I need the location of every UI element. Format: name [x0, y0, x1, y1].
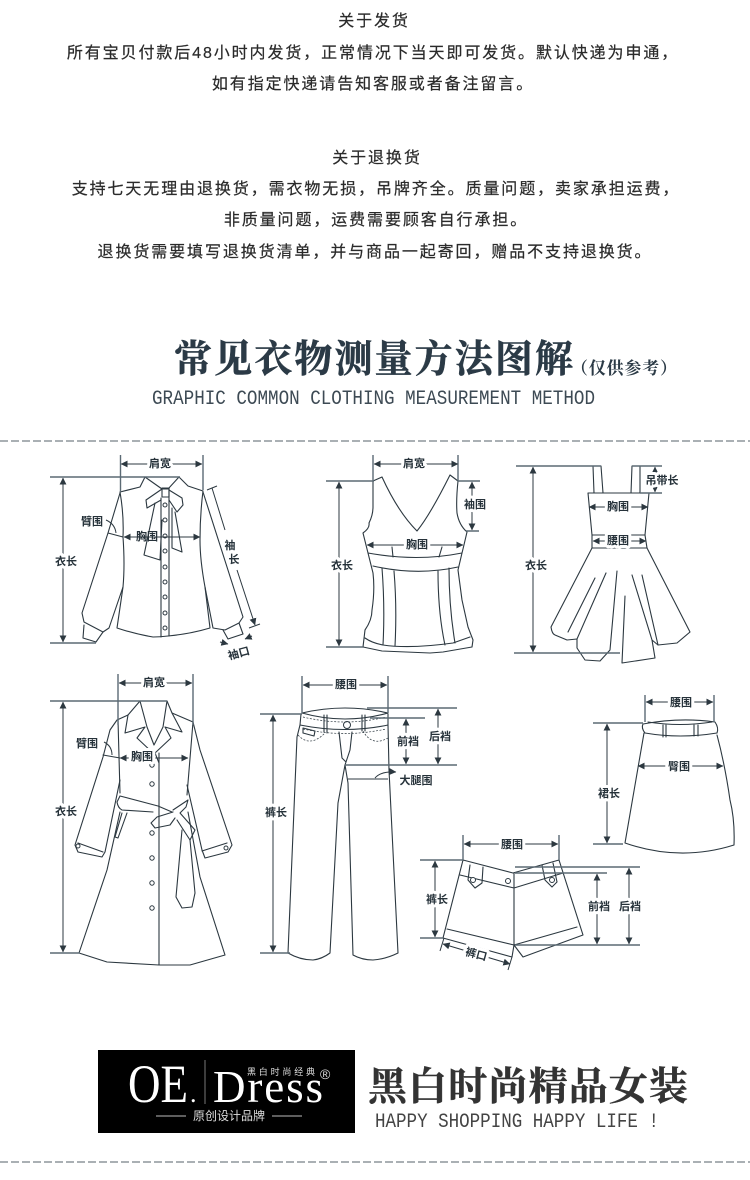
- slogan chinese: 黑白时尚精品女装: [368, 1066, 688, 1109]
- garment diagram: long coat: [50, 674, 232, 965]
- measure: length: 衣长: [55, 554, 77, 568]
- heading: shipping: 关于发货: [338, 12, 410, 30]
- measure: arm: [81, 514, 116, 533]
- measure: shoulder: 肩宽: [143, 675, 165, 689]
- measure: shoulder: [121, 456, 202, 470]
- garment diagram: blouse: [50, 455, 260, 663]
- text block: returns notes: [72, 149, 680, 261]
- measure: armhole: [464, 482, 486, 530]
- tank outline: [363, 475, 473, 653]
- measure: front rise: 前裆: [397, 734, 419, 748]
- garment diagram: skirt: [593, 695, 734, 853]
- logo dot: .: [190, 1079, 196, 1108]
- measure: arm: 臂围: [76, 736, 98, 750]
- heading note: （仅供参考）: [571, 358, 677, 378]
- measure: length: 衣长: [55, 804, 77, 818]
- title: [152, 339, 677, 411]
- measure: leg opening: 裤口: [464, 944, 489, 964]
- brand logo: [98, 1050, 355, 1133]
- measure: waist: 腰围: [335, 678, 357, 691]
- measure: waist: 腰围: [607, 534, 629, 547]
- measure: waist: [646, 696, 713, 709]
- shorts outline: [443, 860, 583, 957]
- main heading: 常见衣物测量方法图解: [174, 339, 575, 381]
- returns line 1: 支持七天无理由退换货，需衣物无损，吊牌齐全。质量问题，卖家承担运费，: [72, 180, 680, 198]
- returns line 2: 非质量问题，运费需要顾客自行承担。: [224, 211, 528, 229]
- measure: sleeve: 袖: [224, 538, 236, 552]
- measure: length: 裤长: [426, 892, 448, 906]
- measure: waist: 腰围: [501, 838, 523, 851]
- measure: length: 裙长: [598, 786, 620, 800]
- trousers outline: [288, 708, 398, 960]
- measure: back rise: [619, 868, 641, 944]
- measure: chest: [124, 529, 200, 543]
- garment diagram: tank top: [326, 455, 486, 653]
- registered mark: ®: [320, 1066, 331, 1082]
- logo wordmark OE: OE: [128, 1054, 188, 1114]
- garment diagram: trousers: [260, 676, 457, 960]
- measure: strap: [646, 467, 678, 492]
- measure: thigh: [348, 772, 432, 787]
- measure: front rise: [397, 719, 419, 764]
- measure: arm: 臂围: [81, 514, 103, 528]
- measure: cuff: [220, 636, 252, 663]
- blouse outline: [82, 477, 243, 642]
- logo wordmark Dress: Dress: [213, 1062, 323, 1112]
- measure: shoulder: [374, 456, 458, 470]
- measure: strap: 吊带长: [646, 473, 678, 487]
- measure: armhole: 袖围: [464, 497, 486, 511]
- measure: leg opening: [440, 938, 512, 970]
- measure: waist: 腰围: [670, 696, 692, 709]
- measure: back rise: [429, 709, 451, 764]
- measure: thigh: 大腿围: [400, 773, 432, 787]
- slogan english: HAPPY SHOPPING HAPPY LIFE !: [375, 1111, 659, 1134]
- measure: chest: 胸围: [607, 499, 629, 513]
- measure: back rise: 后裆: [619, 899, 641, 913]
- english subtitle: GRAPHIC COMMON CLOTHING MEASUREMENT METHOD: [152, 388, 595, 411]
- measure: chest: [367, 537, 463, 551]
- measure: hip: [638, 760, 723, 773]
- measure: waist: [303, 678, 387, 691]
- measure: back rise: 后裆: [429, 729, 451, 743]
- measure: shoulder: [119, 675, 192, 689]
- measure: sleeve: 长: [228, 552, 240, 566]
- measure: hip: 臀围: [668, 760, 690, 773]
- measure: waist: [593, 534, 646, 547]
- measure: chest: 胸围: [136, 529, 158, 543]
- measure: length: 衣长: [525, 558, 547, 572]
- measure: chest: 胸围: [131, 749, 153, 763]
- text block: shipping notes: [67, 12, 679, 93]
- logo subline: 原创设计品牌: [193, 1109, 265, 1123]
- garment diagram: dress: [514, 466, 690, 663]
- measure: front rise: 前裆: [588, 899, 610, 913]
- brand slogan: [368, 1066, 688, 1134]
- measure: arm: [76, 736, 112, 755]
- measure: waist: [464, 838, 558, 851]
- measure: length: [598, 724, 620, 843]
- measure: sleeve: [207, 486, 260, 628]
- returns line 3: 退换货需要填写退换货清单，并与商品一起寄回，赠品不支持退换货。: [98, 243, 652, 261]
- measure: length: [426, 861, 448, 937]
- measure: chest: [120, 749, 188, 763]
- logo small tagline: 黑白时尚经典: [247, 1066, 315, 1077]
- measure: chest: [589, 499, 648, 513]
- measure: shoulder: 肩宽: [403, 456, 425, 470]
- measure: length: 衣长: [331, 558, 353, 572]
- measure: front rise: [588, 874, 610, 944]
- measure: length: 裤长: [265, 805, 287, 819]
- measure: cuff: 袖口: [226, 643, 251, 663]
- dress outline: [551, 466, 690, 663]
- shipping line 1: 所有宝贝付款后48小时内发货，正常情况下当天即可发货。默认快递为申通，: [67, 44, 679, 62]
- garment diagram: shorts: [420, 835, 641, 970]
- measure: chest: 胸围: [406, 537, 428, 551]
- measure: shoulder: 肩宽: [149, 456, 171, 470]
- skirt outline: [625, 720, 734, 853]
- shipping line 2: 如有指定快递请告知客服或者备注留言。: [212, 75, 534, 93]
- coat outline: [75, 701, 232, 965]
- heading: returns: 关于退换货: [332, 149, 422, 167]
